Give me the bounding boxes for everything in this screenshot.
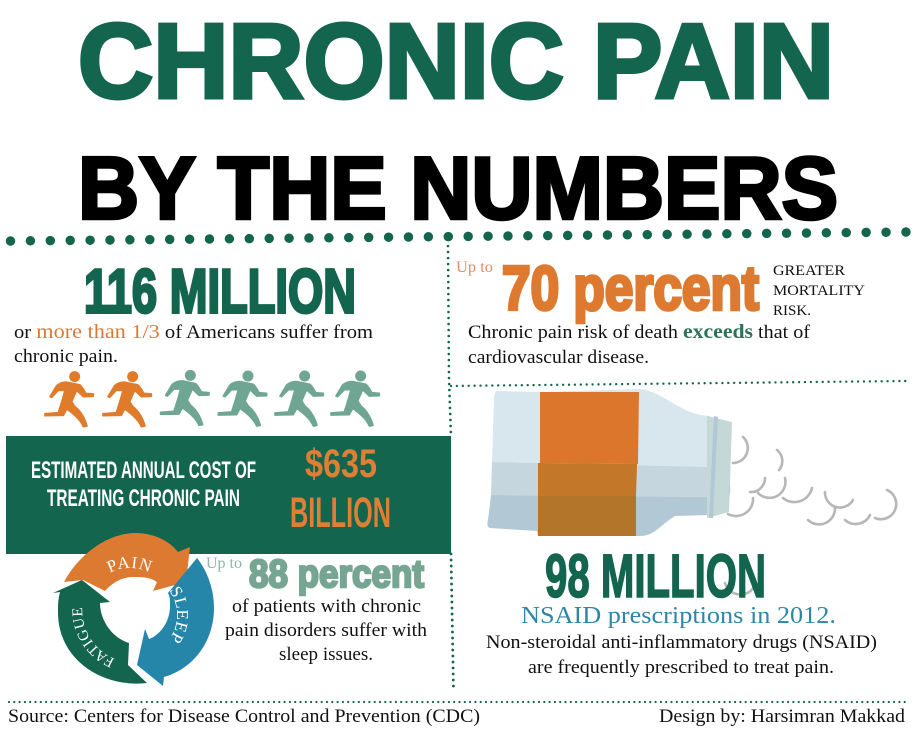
text: exceeds cardiovascular risk: Chronic pain risk of death exceeds that of (468, 321, 811, 343)
arrow: sleep (137, 558, 214, 686)
subheading: nsaid prescriptions: NSAID prescriptions in 2012. (521, 603, 836, 629)
title: chronic pain: CHRONIC PAIN (78, 2, 834, 120)
text: nsaid description (486, 633, 877, 678)
footer: source: Source: Centers for Disease Control and Prevention (CDC) (8, 707, 480, 727)
text: nsaid description: are frequently prescribed to treat pain. (528, 658, 834, 678)
arrow: sleep: SLEEP (170, 586, 188, 643)
figure: billion: BILLION (290, 489, 391, 537)
text: chronic pain: chronic pain. (14, 347, 118, 367)
arrow: pain: PAIN (106, 556, 153, 572)
figure: $635: $635 (305, 442, 377, 486)
text: greater mortality risk (773, 263, 865, 319)
text: greater mortality risk: MORTALITY (773, 283, 865, 299)
label: up to: Up to (456, 259, 493, 276)
icon: green runner 4 (218, 371, 267, 426)
text: sleep issues description (225, 597, 427, 665)
icon: green runner 6 (331, 371, 379, 426)
panel: 70 percent stat (456, 254, 865, 368)
icon: orange runner 1 (45, 372, 93, 427)
arrow: fatigue (53, 580, 147, 684)
text: sleep issues description: pain disorders suffer with (225, 621, 427, 641)
text: sleep issues description: of patients with chronic (232, 597, 421, 617)
headline: 116 million: 116 MILLION (84, 258, 356, 326)
text: sleep issues description: sleep issues. (279, 645, 373, 665)
text: estimated annual cost: ESTIMATED ANNUAL COST OF (31, 457, 256, 484)
headline: 98 million: 98 MILLION (545, 542, 766, 610)
panel: 116 million stat (14, 258, 374, 367)
text: more than one third: or more than 1/3 of Americans suffer from (14, 321, 374, 343)
diagram: pain sleep fatigue cycle (53, 533, 214, 686)
icon: orange runner 2 (103, 372, 151, 427)
label: up to: Up to (206, 555, 242, 572)
text: greater mortality risk: RISK. (773, 303, 811, 319)
text: exceeds cardiovascular risk: cardiovascular disease. (468, 348, 649, 368)
text: exceeds cardiovascular risk (468, 321, 811, 368)
pills (725, 437, 896, 595)
footer: designer credit: Design by: Harsimran Makkad (659, 707, 906, 727)
headline: 88 percent: 88 percent (249, 553, 424, 596)
arrow: pain (64, 533, 190, 591)
icons: six runners, two orange (45, 371, 379, 427)
icon: green runner 3 (161, 371, 209, 425)
text: greater mortality risk: GREATER (773, 263, 845, 279)
bottle (487, 389, 732, 536)
panel: 88 percent stat (206, 553, 427, 665)
text: treating chronic pain: TREATING CHRONIC PAIN (47, 485, 240, 512)
arrow: fatigue: FATIGUE (72, 608, 114, 668)
headline: 70 percent: 70 percent (502, 254, 759, 324)
panel: 98 million stat (486, 542, 877, 678)
icon: green runner 5 (275, 371, 323, 426)
illustration: pills spilling from bottle (487, 389, 896, 595)
title: by the numbers: BY THE NUMBERS (78, 139, 838, 238)
panel: annual cost band (6, 436, 451, 554)
text: nsaid description: Non-steroidal anti-inflammatory drugs (NSAID) (486, 633, 877, 653)
